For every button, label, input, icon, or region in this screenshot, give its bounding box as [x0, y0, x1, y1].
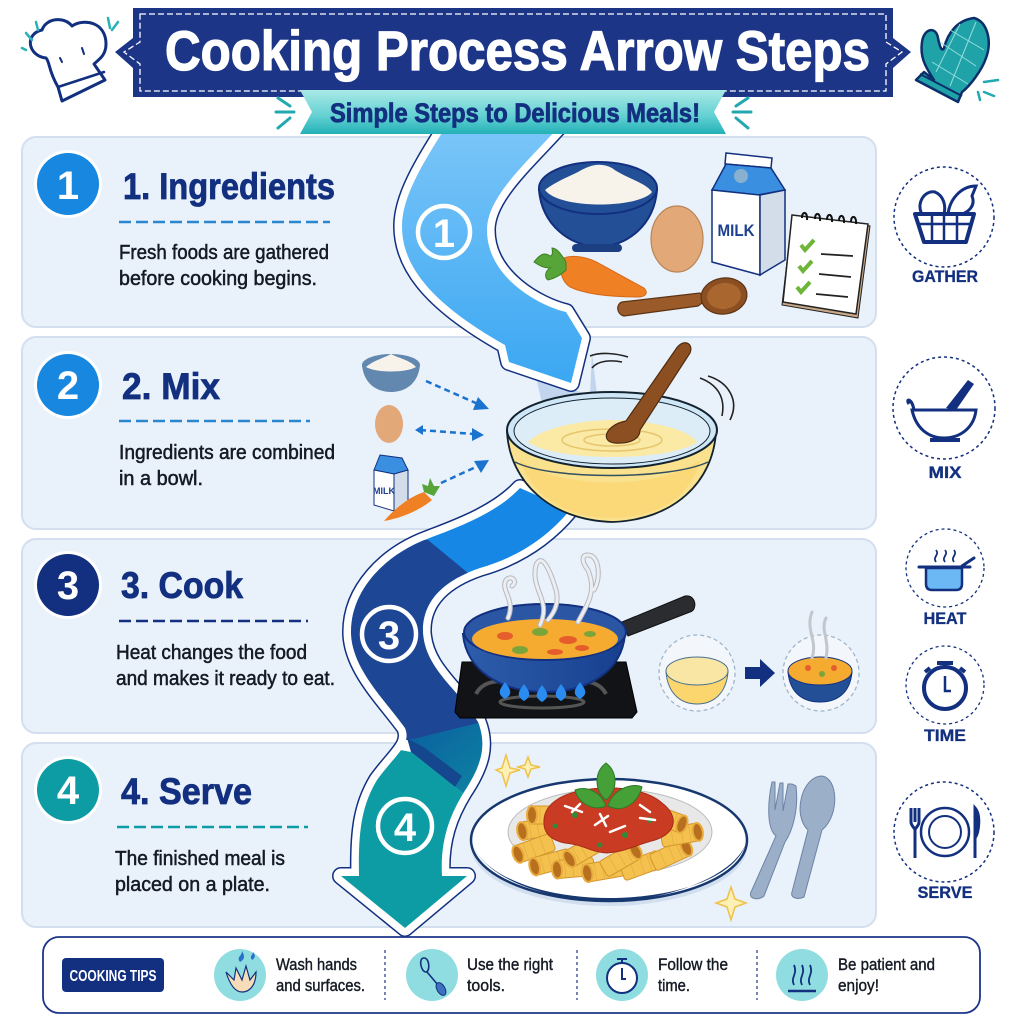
icon: serve plate [894, 782, 994, 902]
illustration: checklist notepad [782, 213, 870, 318]
step 3 text block [34, 551, 335, 690]
icon: oven mitt [916, 18, 998, 102]
number badge 1 [34, 150, 102, 218]
step 2 text block [34, 351, 335, 490]
icon: time stopwatch [906, 646, 984, 745]
cooking tips badge [62, 958, 164, 992]
heading: 3. Cook [121, 565, 243, 606]
steam [505, 555, 598, 625]
icon: gather basket [894, 167, 994, 286]
illustration: wooden spoon [618, 275, 749, 317]
tip: right tools: tools. [467, 977, 505, 995]
title: Cooking Process Arrow Steps [165, 19, 870, 82]
illustration: small milk carton [373, 455, 408, 511]
number badge 2 [34, 351, 102, 419]
heading: 1. Ingredients [123, 166, 335, 207]
label time: TIME [924, 726, 966, 745]
label mix: MIX [928, 463, 962, 482]
arrow number 4: 4 [394, 806, 417, 850]
pan handle [622, 596, 695, 636]
label milk: MILK [718, 221, 755, 240]
illustration: spoon [792, 776, 835, 898]
subtitle ribbon [276, 90, 751, 134]
illustration: egg [651, 206, 703, 272]
tip: right tools: Use the right [467, 956, 553, 974]
description: in a bowl. [119, 468, 203, 490]
wooden mixing spoon [606, 343, 691, 443]
panel: step 3 cook [22, 539, 876, 733]
number badge 4: 4 [57, 769, 80, 813]
illustration: batter to soup transition [659, 612, 859, 711]
tip: follow the time: Follow the [658, 956, 728, 974]
arrow number 3 [362, 607, 416, 661]
flames [500, 682, 585, 702]
icon: mix bowl [893, 357, 995, 482]
step 4 text block [34, 756, 308, 896]
illustration: milk carton [712, 153, 785, 275]
heading: 4. Serve [121, 771, 252, 812]
arrow number 3: 3 [378, 614, 400, 658]
basil [597, 763, 615, 800]
tip: wash hands [214, 949, 365, 1001]
tip: right tools [406, 949, 553, 1001]
arrow number 1: 1 [433, 212, 455, 256]
description: Ingredients are combined [119, 442, 335, 464]
stove [455, 662, 637, 718]
illustration: flour bowl [539, 162, 657, 252]
illustration: small flour bowl [362, 354, 420, 392]
illustration: small carrot [384, 478, 440, 521]
heading: 2. Mix [122, 366, 220, 407]
number badge 2: 2 [57, 364, 79, 408]
description: and makes it ready to eat. [116, 668, 335, 690]
number badge 3: 3 [57, 564, 79, 608]
arrow: steps 2 to 4 [332, 479, 576, 936]
icon: chef hat [22, 18, 118, 101]
tip: follow the time: time. [658, 977, 690, 995]
illustration: pasta plate [471, 763, 747, 906]
tomato sauce [544, 788, 673, 853]
tip: be patient: enjoy! [838, 977, 879, 995]
label serve: SERVE [918, 883, 972, 902]
step 1 text block [34, 150, 335, 290]
panel: step 2 mix [22, 337, 876, 529]
header banner [115, 8, 911, 97]
icon: heat pot [906, 529, 984, 628]
arrows: ingredients into bowl [415, 381, 489, 483]
arrow: step 1 [402, 120, 582, 383]
number badge 1: 1 [57, 164, 79, 208]
cooking tips bar [43, 937, 980, 1013]
arrow number 1 [418, 206, 470, 258]
tip: be patient: Be patient and [838, 956, 935, 974]
illustration: fork [750, 782, 797, 899]
arrow number 4 [378, 799, 432, 853]
cooking tips badge: COOKING TIPS [70, 968, 157, 985]
number badge 4 [34, 756, 102, 824]
illustration: small egg [375, 405, 403, 443]
number badge 3 [34, 551, 102, 619]
transition arrow [745, 659, 775, 687]
description: Heat changes the food [116, 642, 307, 664]
description: placed on a plate. [115, 874, 270, 896]
illustration: carrot [534, 248, 646, 297]
tip: wash hands: Wash hands [276, 956, 357, 974]
description: Fresh foods are gathered [119, 242, 329, 264]
pan [463, 634, 625, 692]
tip: be patient [776, 949, 935, 1001]
panel: step 1 ingredients [22, 137, 876, 327]
illustration: mixing bowl [507, 343, 734, 522]
description: before cooking begins. [119, 268, 317, 290]
illustration: stove and pan [455, 555, 695, 718]
tip: wash hands: and surfaces. [276, 977, 365, 995]
description: The finished meal is [115, 848, 285, 870]
label small milk: MILK [373, 486, 395, 496]
chute behind mixing bowl [536, 352, 600, 420]
label heat: HEAT [924, 609, 967, 628]
subtitle: Simple Steps to Delicious Meals! [330, 98, 700, 128]
panel: step 4 serve [22, 743, 876, 927]
sparkles [496, 755, 746, 920]
label gather: GATHER [912, 267, 978, 286]
tip: follow the time [596, 949, 728, 1001]
